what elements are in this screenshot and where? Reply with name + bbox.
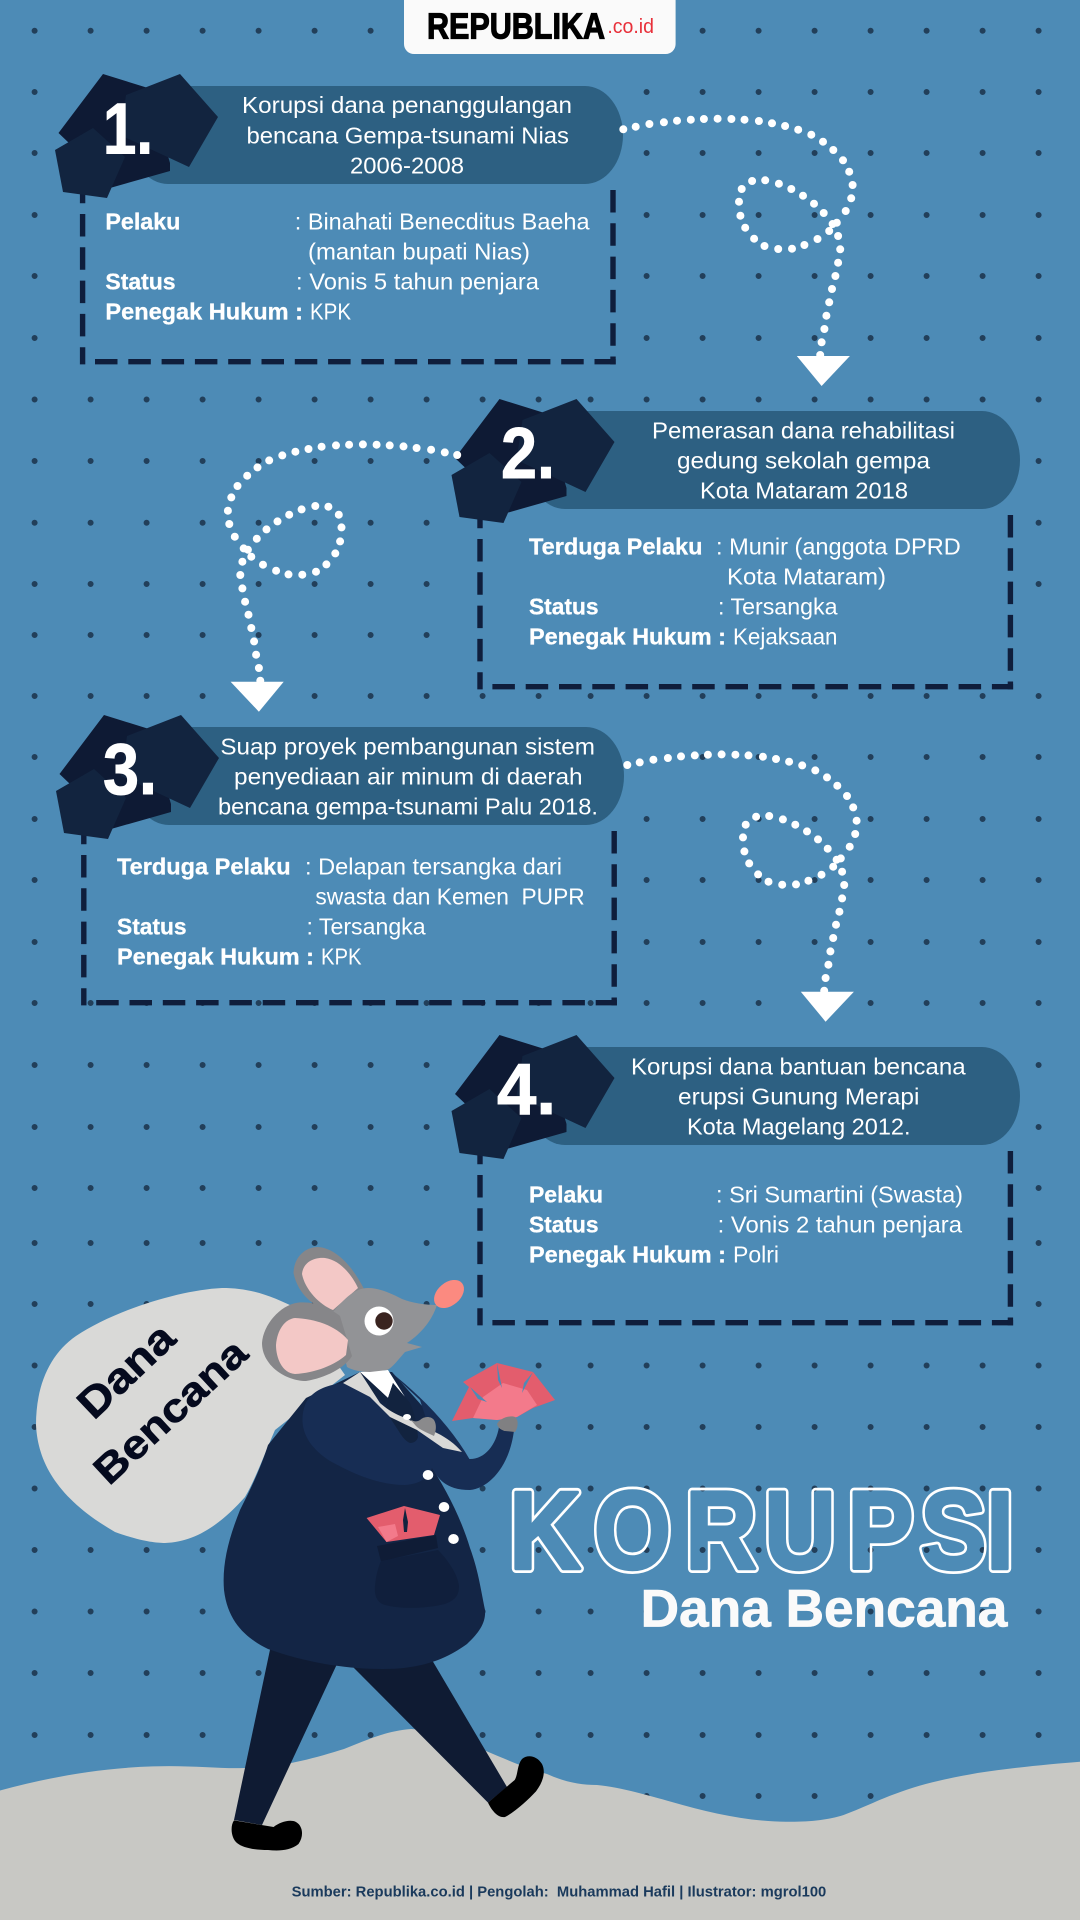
illustration: mouse in suit carrying a sack — [36, 1247, 555, 1850]
icon: rocks 4 — [452, 1035, 614, 1159]
details 4: Penegak Hukum : — [529, 1242, 726, 1268]
arrow: dotted path from case 1 to case 2 — [623, 119, 853, 386]
sack label: Bencana — [85, 1330, 257, 1493]
details 2: Terduga Pelaku — [529, 533, 702, 559]
details 2: Kota Mataram) — [727, 563, 886, 589]
heading text 3 — [218, 733, 598, 819]
tie — [385, 1383, 418, 1443]
details 1: : Vonis 5 tahun penjara — [296, 268, 539, 294]
icon: rocks 3 — [56, 715, 219, 839]
number 2: 2. — [501, 414, 555, 494]
dashed box 4 — [480, 1142, 1013, 1325]
details 4: Pelaku — [529, 1182, 603, 1208]
lapel — [343, 1372, 462, 1452]
details 4: : Sri Sumartini (Swasta) — [716, 1182, 963, 1208]
heading text 1: Korupsi dana penanggulangan — [242, 92, 572, 118]
heading pill 3 — [131, 727, 624, 825]
collar line — [356, 1372, 388, 1404]
arm — [302, 1383, 514, 1490]
jacket chest — [388, 1370, 470, 1462]
heading pill 2 — [527, 411, 1020, 509]
sack — [36, 1288, 345, 1543]
arrow: dotted path from case 3 to case 4 — [627, 754, 857, 1022]
sack label — [68, 1313, 257, 1493]
details 2: : Tersangka — [718, 593, 838, 619]
details 2 — [529, 533, 961, 649]
coat body — [224, 1372, 485, 1669]
details 2: Penegak Hukum : — [529, 623, 726, 649]
heading text 4: erupsi Gunung Merapi — [678, 1083, 919, 1109]
heading text 1: 2006-2008 — [350, 152, 464, 178]
logo: Republika — [404, 0, 676, 54]
details 1: : Binahati Benecditus Baeha — [295, 208, 590, 234]
arrow: dotted path from case 2 to case 3 — [228, 444, 457, 712]
details 1 — [105, 208, 590, 324]
shirt — [360, 1370, 405, 1398]
details 2: : Munir (anggota DPRD — [716, 533, 961, 559]
money fan — [452, 1363, 555, 1421]
heading text 3: Suap proyek pembangunan sistem — [220, 733, 595, 759]
logo: Republika: REPUBLIKA — [427, 5, 605, 46]
heading text 1 — [242, 92, 572, 178]
eye — [364, 1306, 394, 1336]
dashed box 2 — [480, 506, 1013, 689]
shoes — [232, 1756, 544, 1850]
details 3: Penegak Hukum : — [117, 943, 314, 969]
sack label: Dana — [68, 1313, 185, 1428]
subtitle: Dana Bencana: Dana Bencana — [641, 1580, 1008, 1639]
details 1: Penegak Hukum : — [105, 298, 303, 324]
legs — [234, 1645, 507, 1825]
details 4 — [529, 1182, 963, 1268]
details 2: Status — [529, 593, 598, 619]
title: Korupsi: KORUPSI — [509, 1470, 1014, 1593]
number 3: 3. — [103, 730, 157, 810]
front ear — [262, 1302, 352, 1381]
shirt button — [403, 1414, 411, 1420]
heading text 4: Korupsi dana bantuan bencana — [631, 1053, 966, 1079]
icon: rocks 1 — [55, 74, 218, 198]
details 1: Status — [105, 268, 176, 294]
details 1: (mantan bupati Nias) — [308, 238, 530, 264]
details 1: Pelaku — [105, 208, 180, 234]
heading pill 4 — [527, 1047, 1020, 1145]
dashed box 1 — [83, 181, 616, 364]
details 4: Polri — [733, 1242, 779, 1268]
heading text 3: penyediaan air minum di daerah — [234, 763, 583, 789]
details 3: swasta dan Kemen PUPR — [315, 883, 585, 909]
dashed box 3 — [84, 822, 617, 1005]
details 4: : Vonis 2 tahun penjara — [718, 1212, 962, 1238]
pocket money — [367, 1506, 440, 1542]
panel: case 2 — [452, 399, 1020, 689]
icon: rocks 2 — [452, 399, 614, 523]
details 4: Status — [529, 1212, 598, 1238]
details 3: KPK — [321, 943, 362, 969]
heading text 4: Kota Magelang 2012. — [687, 1113, 910, 1139]
panel: case 3 — [56, 715, 624, 1005]
details 1: KPK — [310, 298, 352, 324]
heading text 4 — [631, 1053, 966, 1139]
head — [333, 1288, 437, 1372]
pocket — [375, 1535, 459, 1608]
logo: Republika: .co.id — [607, 16, 654, 38]
right hand — [497, 1416, 518, 1432]
details 2: Kejaksaan — [733, 623, 838, 649]
details 3 — [117, 853, 585, 969]
heading text 2: Kota Mataram 2018 — [700, 477, 908, 503]
number 1: 1. — [103, 90, 153, 170]
panel: case 1 — [55, 74, 623, 364]
back ear — [294, 1247, 364, 1312]
buttons — [423, 1470, 459, 1544]
details 3: : Tersangka — [306, 913, 426, 939]
heading text 2 — [652, 417, 955, 503]
ground — [0, 1729, 1080, 1920]
heading pill 1 — [130, 86, 623, 184]
nose — [429, 1274, 469, 1314]
details 3: Terduga Pelaku — [117, 853, 291, 879]
heading text 1: bencana Gempa-tsunami Nias — [246, 122, 569, 148]
details 3: Status — [117, 913, 187, 939]
heading text 3: bencana gempa-tsunami Palu 2018. — [218, 793, 598, 819]
number 4: 4. — [497, 1050, 556, 1130]
panel: case 4 — [452, 1035, 1020, 1325]
source credit: Sumber: Republika.co.id | Pengolah: Muhammad Hafil | Ilustrator: mgrol100 — [292, 1884, 826, 1901]
heading text 2: gedung sekolah gempa — [677, 447, 930, 473]
heading text 2: Pemerasan dana rehabilitasi — [652, 417, 955, 443]
left hand — [410, 1417, 436, 1436]
details 3: : Delapan tersangka dari — [305, 853, 562, 879]
